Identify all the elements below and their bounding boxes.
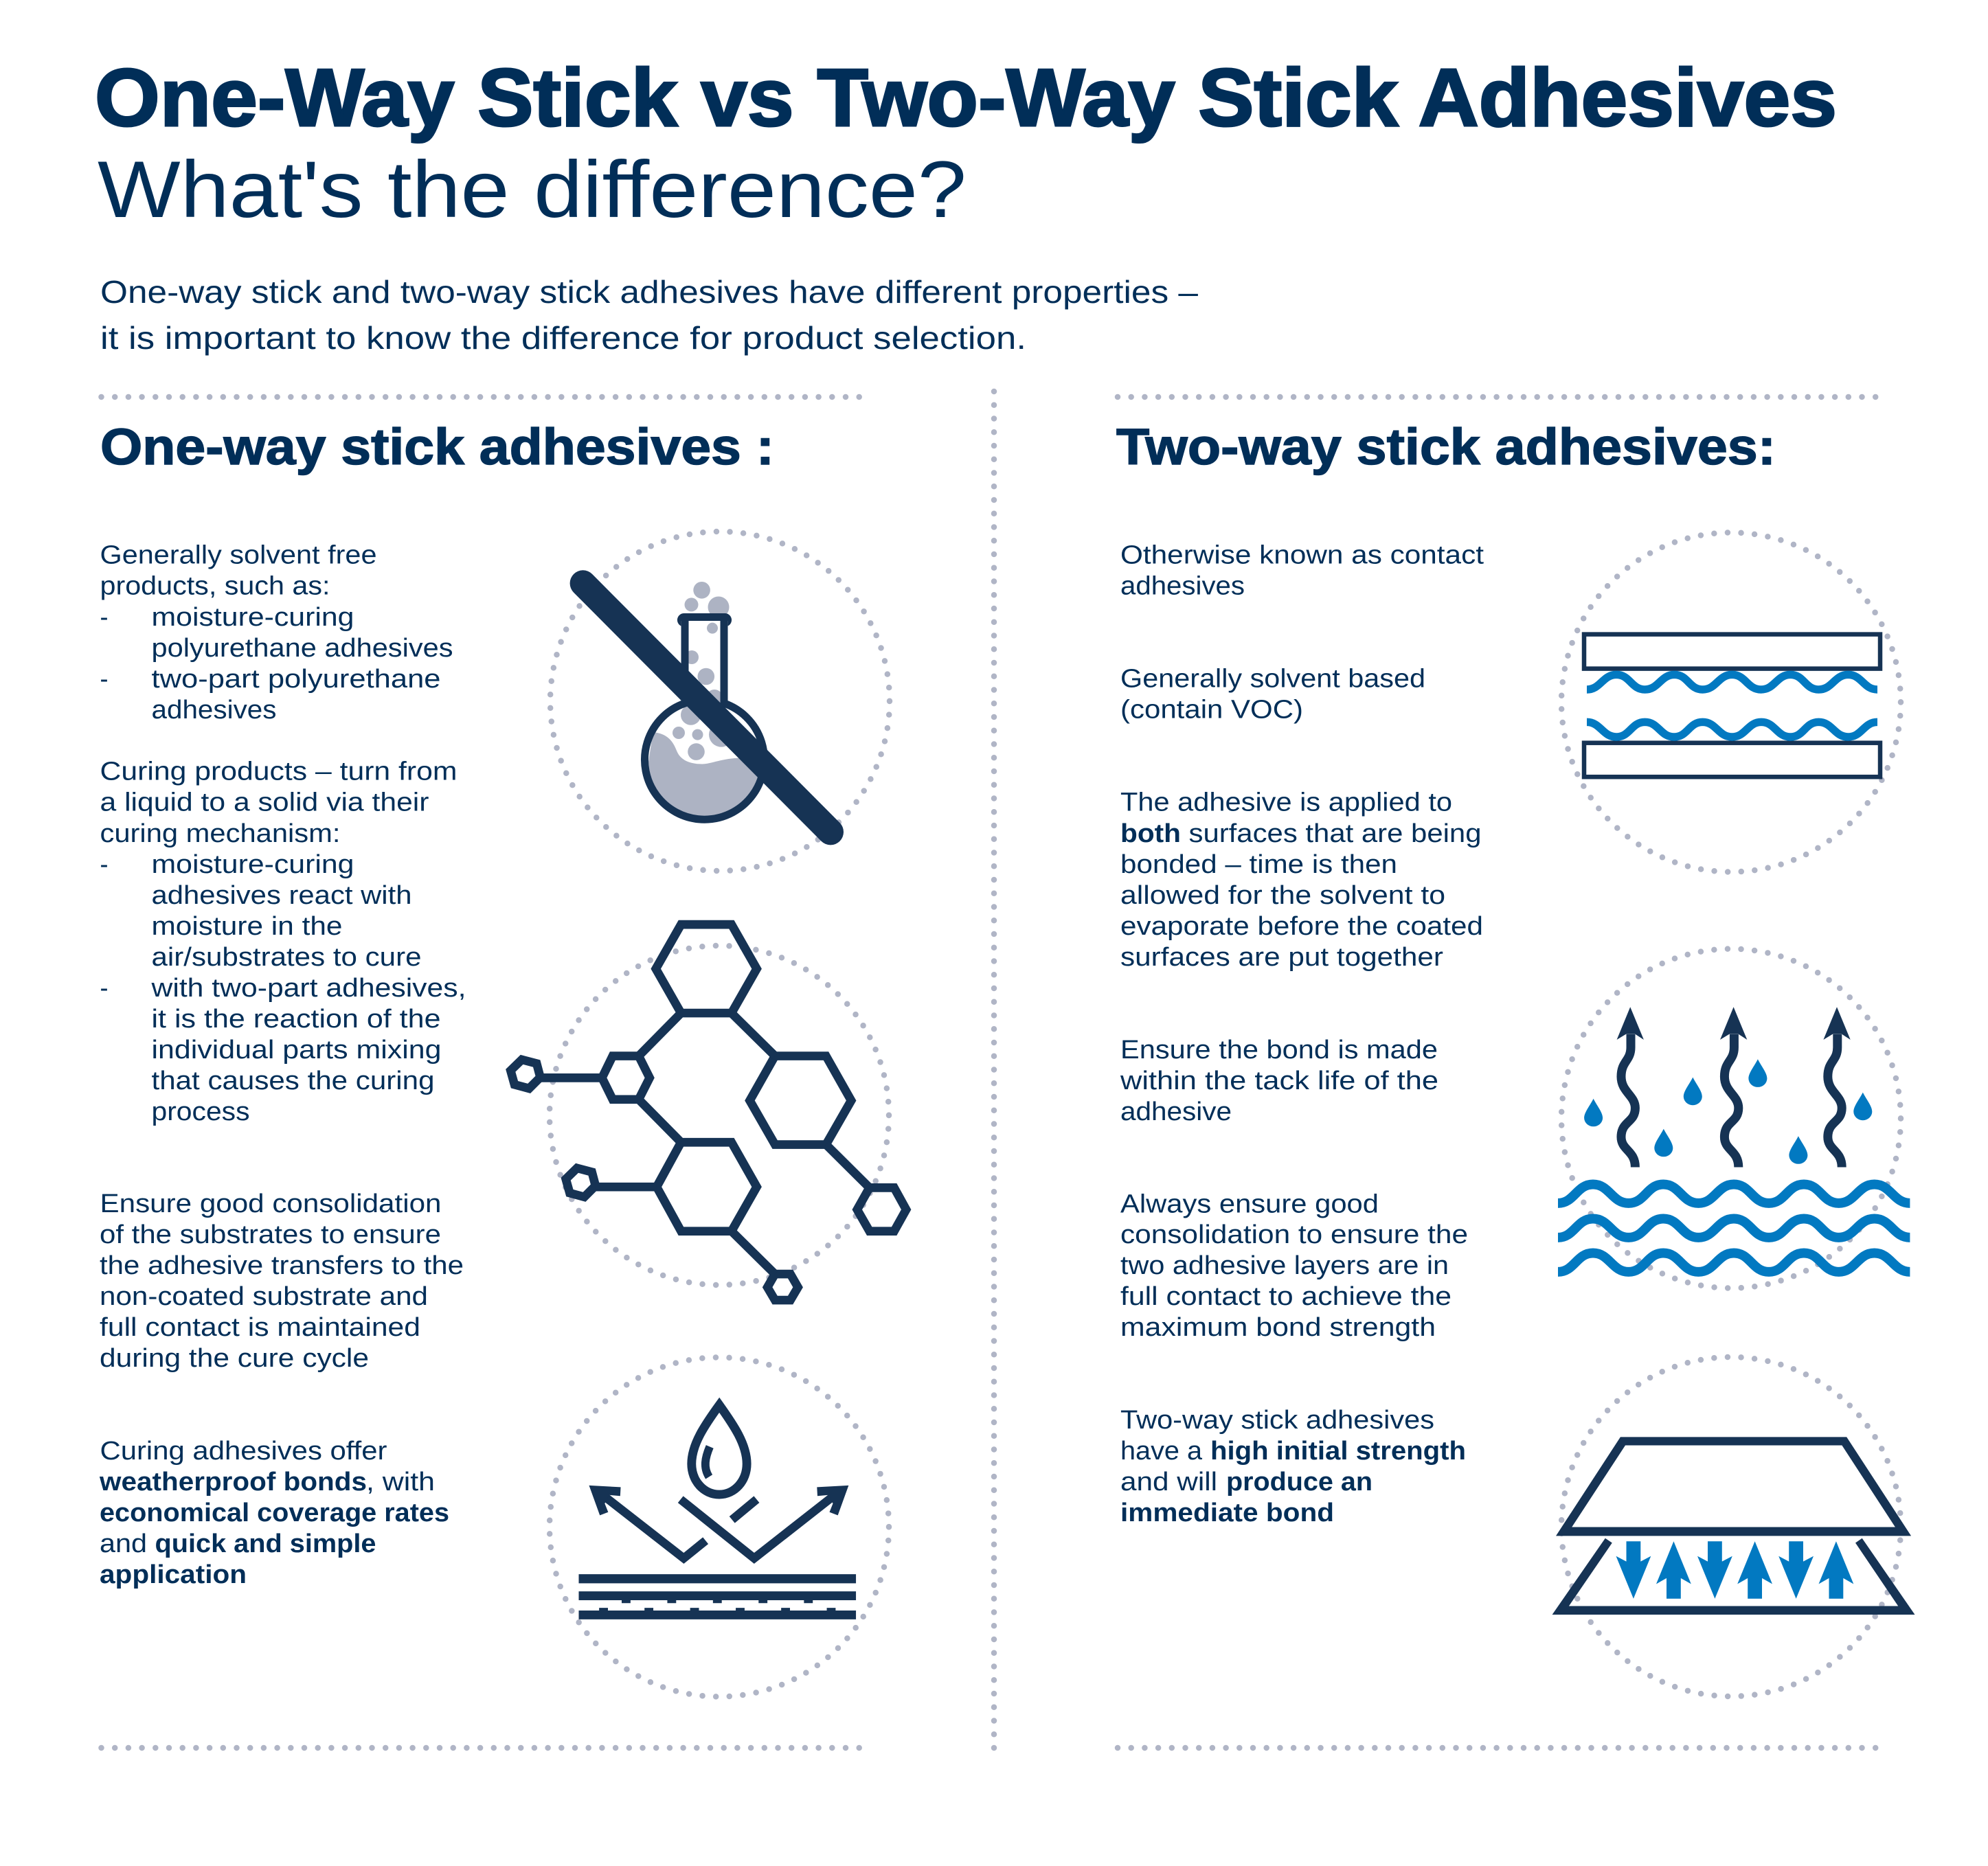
intro text bbox=[100, 274, 1198, 356]
icon: solvent evaporating from adhesive bbox=[1558, 949, 1910, 1288]
text: always ensure consolidation: maximum bond strength bbox=[1120, 1313, 1436, 1342]
text: solvent free products: polyurethane adhesives bbox=[151, 634, 453, 663]
text: curing adhesives offer: economical coverage rates bbox=[100, 1499, 449, 1527]
text: curing products: curing mechanism: bbox=[100, 819, 341, 848]
text: ensure good consolidation bbox=[100, 1190, 464, 1373]
text: curing products: - bbox=[100, 974, 109, 1003]
icon: two substrates with adhesive films bbox=[1561, 533, 1901, 872]
text: curing adhesives offer bbox=[99, 1437, 449, 1589]
text: applied to both surfaces: bonded – time is then bbox=[1120, 850, 1397, 879]
text: curing adhesives offer: and bbox=[100, 1529, 147, 1558]
text: solvent free products: products, such as: bbox=[100, 571, 330, 600]
text: applied to both surfaces: surfaces are put together bbox=[1120, 943, 1443, 972]
text: solvent free products: - bbox=[100, 665, 109, 694]
text: curing products: - bbox=[100, 850, 109, 879]
text: always ensure consolidation: consolidation to ensure the bbox=[1120, 1220, 1468, 1249]
text: solvent based: (contain VOC) bbox=[1120, 695, 1303, 724]
text: curing products: Curing products – turn from bbox=[100, 757, 458, 786]
text: curing products: that causes the curing bbox=[151, 1067, 434, 1095]
text: applied to both surfaces: allowed for the solvent to bbox=[1120, 881, 1445, 910]
text: curing products: individual parts mixing bbox=[151, 1036, 441, 1065]
text: always ensure consolidation: Always ensure good bbox=[1120, 1190, 1379, 1218]
text: tack life: adhesive bbox=[1120, 1097, 1232, 1126]
text: solvent free products: moisture-curing bbox=[151, 603, 354, 632]
text: high initial strength bbox=[1120, 1406, 1466, 1527]
text: applied to both surfaces bbox=[1120, 788, 1483, 972]
text: solvent based: Generally solvent based bbox=[1120, 665, 1425, 694]
text: curing adhesives offer: quick and simple bbox=[155, 1529, 376, 1558]
text: high initial strength: produce an bbox=[1226, 1468, 1373, 1497]
text: curing adhesives offer: , with bbox=[366, 1468, 435, 1497]
text: solvent free products: - bbox=[100, 603, 109, 632]
text: ensure good consolidation: full contact is maintained bbox=[100, 1313, 420, 1342]
icon: crossed-out flask bbox=[550, 532, 890, 871]
text: ensure good consolidation: the adhesive transfers to the bbox=[100, 1251, 464, 1280]
text: curing adhesives offer: Curing adhesives offer bbox=[100, 1437, 387, 1466]
text: applied to both surfaces: The adhesive is applied to bbox=[1120, 788, 1452, 817]
icon: water drop repelled from layered surface bbox=[550, 1357, 889, 1696]
text: tack life bbox=[1120, 1036, 1438, 1126]
text: contact adhesives: Otherwise known as contact bbox=[1120, 541, 1484, 570]
text: tack life: within the tack life of the bbox=[1120, 1067, 1438, 1095]
text: solvent free products bbox=[100, 541, 453, 725]
heading: two-way stick adhesives: Two-way stick adhesives: bbox=[1116, 418, 1776, 475]
text: high initial strength: and will bbox=[1120, 1468, 1217, 1497]
text: solvent based bbox=[1120, 665, 1425, 724]
text: always ensure consolidation bbox=[1120, 1190, 1468, 1342]
text: curing products: air/substrates to cure bbox=[151, 943, 422, 972]
icon: molecule hexagons bbox=[510, 924, 906, 1300]
text: solvent free products: adhesives bbox=[151, 696, 276, 725]
text: curing products: process bbox=[151, 1097, 250, 1126]
intro text: One-way stick and two-way stick adhesives have different properties – bbox=[100, 274, 1198, 310]
text: ensure good consolidation: during the cure cycle bbox=[100, 1344, 369, 1373]
text: curing products: adhesives react with bbox=[151, 881, 412, 910]
text: solvent free products: two-part polyurethane bbox=[151, 665, 441, 694]
title: One-Way Stick vs Two-Way Stick Adhesives bbox=[95, 52, 1837, 144]
text: ensure good consolidation: Ensure good consolidation bbox=[100, 1190, 441, 1218]
text: contact adhesives: adhesives bbox=[1120, 571, 1245, 600]
text: solvent free products: Generally solvent free bbox=[100, 541, 376, 570]
text: high initial strength: high initial strength bbox=[1210, 1437, 1466, 1466]
text: ensure good consolidation: non-coated substrate and bbox=[100, 1282, 428, 1311]
text: high initial strength: immediate bond bbox=[1120, 1499, 1334, 1527]
text: curing adhesives offer: weatherproof bonds bbox=[99, 1468, 367, 1497]
text: applied to both surfaces: evaporate before the coated bbox=[1120, 912, 1483, 941]
text: curing products: moisture-curing bbox=[151, 850, 354, 879]
text: applied to both surfaces: both bbox=[1120, 819, 1181, 848]
text: ensure good consolidation: of the substrates to ensure bbox=[100, 1220, 441, 1249]
text: curing products: with two-part adhesives, bbox=[150, 974, 466, 1003]
text: always ensure consolidation: two adhesive layers are in bbox=[1120, 1251, 1449, 1280]
icon: immediate bond between surfaces bbox=[1552, 1357, 1915, 1696]
text: applied to both surfaces: surfaces that are being bbox=[1188, 819, 1481, 848]
text: curing products: it is the reaction of the bbox=[151, 1005, 441, 1034]
heading: one-way stick adhesives: One-way stick adhesives : bbox=[100, 418, 774, 475]
text: high initial strength: Two-way stick adhesives bbox=[1120, 1406, 1434, 1435]
subtitle: What's the difference? bbox=[98, 144, 967, 234]
intro text: it is important to know the difference for product selection. bbox=[100, 320, 1026, 356]
text: always ensure consolidation: full contact to achieve the bbox=[1120, 1282, 1452, 1311]
text: curing products: a liquid to a solid via their bbox=[100, 788, 429, 817]
text: contact adhesives bbox=[1120, 541, 1484, 600]
text: tack life: Ensure the bond is made bbox=[1120, 1036, 1438, 1065]
text: curing products bbox=[100, 757, 466, 1126]
text: curing adhesives offer: application bbox=[100, 1560, 247, 1589]
text: curing products: moisture in the bbox=[151, 912, 342, 941]
text: high initial strength: have a bbox=[1120, 1437, 1203, 1466]
